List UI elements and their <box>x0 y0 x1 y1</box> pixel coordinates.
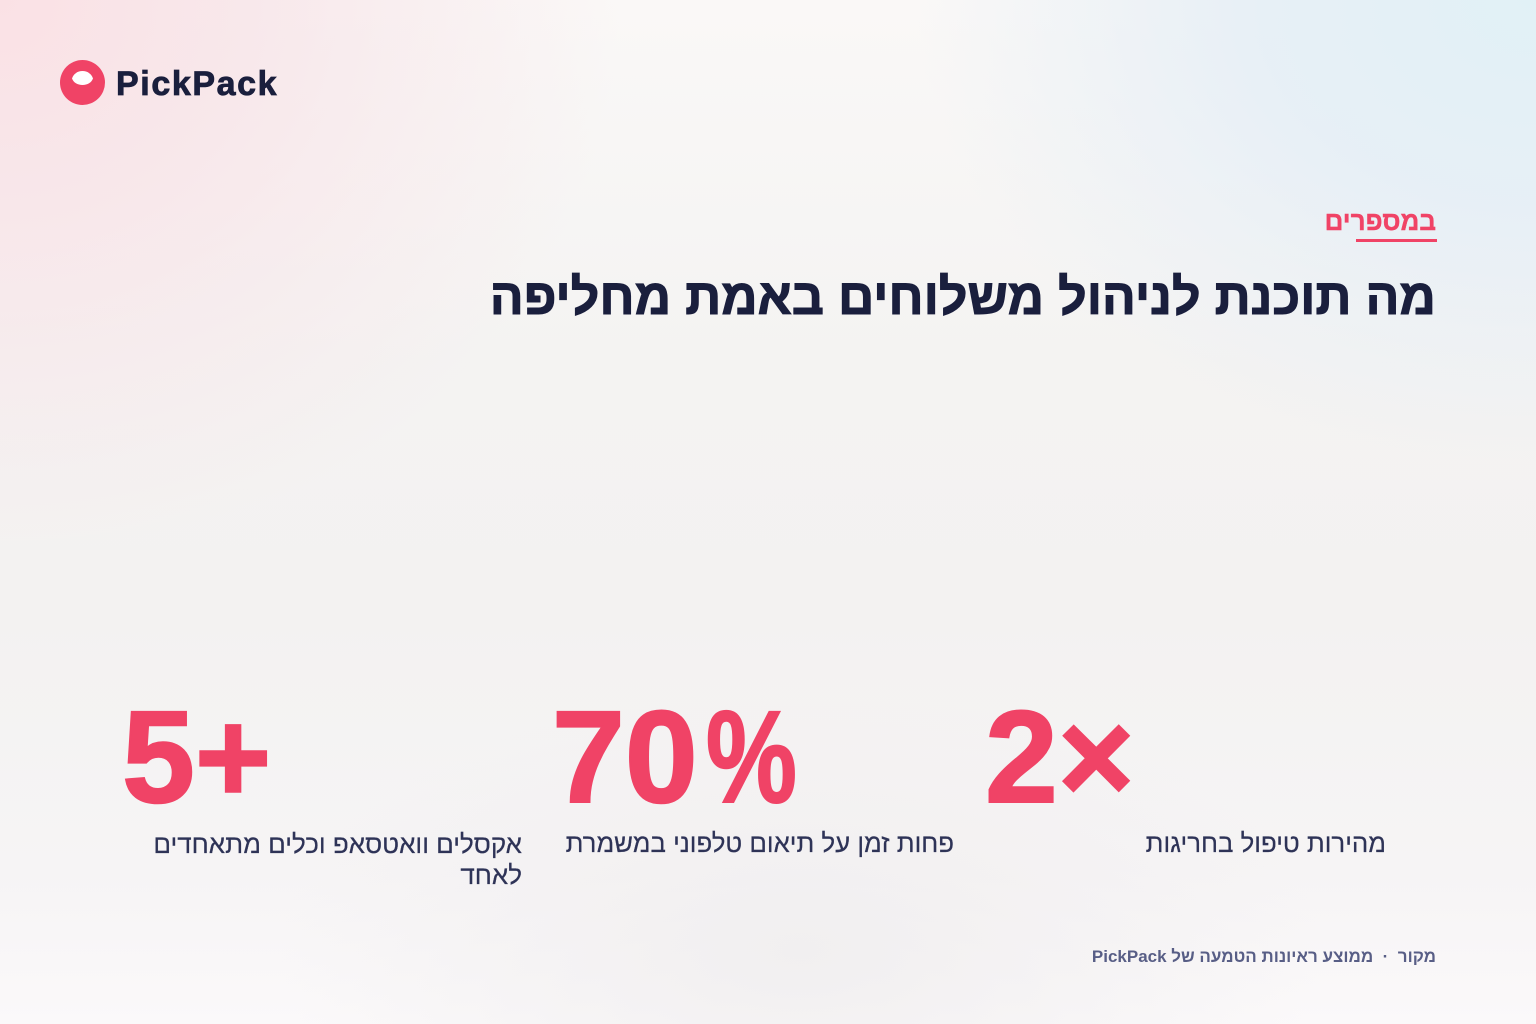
stat: 2x <box>985 683 1386 858</box>
stat number: 2× <box>985 683 1134 830</box>
logo wordmark: PickPack <box>116 65 278 103</box>
stat label: אקסלים וואטסאפ וכלים מתאחדים לאחד <box>153 829 522 890</box>
stat: 70% <box>552 683 954 858</box>
stat number <box>552 683 797 830</box>
source note: מקור · ממוצע ראיונות הטמעה של PickPack <box>1092 947 1436 966</box>
stat label: פחות זמן על תיאום טלפוני במשמרת <box>566 830 954 858</box>
stat number: 70 <box>552 683 698 830</box>
eyebrow underline <box>1356 239 1437 242</box>
icon: logo mark <box>60 60 105 105</box>
logo <box>60 60 278 105</box>
stat number: % <box>706 683 797 830</box>
stat label: מהירות טיפול בחריגות <box>1146 830 1386 858</box>
title: מה תוכנת לניהול משלוחים באמת מחליפה <box>490 269 1436 325</box>
stat: 5+ <box>122 683 522 890</box>
stat number: 5+ <box>122 683 271 830</box>
eyebrow label: במספרים <box>1325 206 1436 236</box>
